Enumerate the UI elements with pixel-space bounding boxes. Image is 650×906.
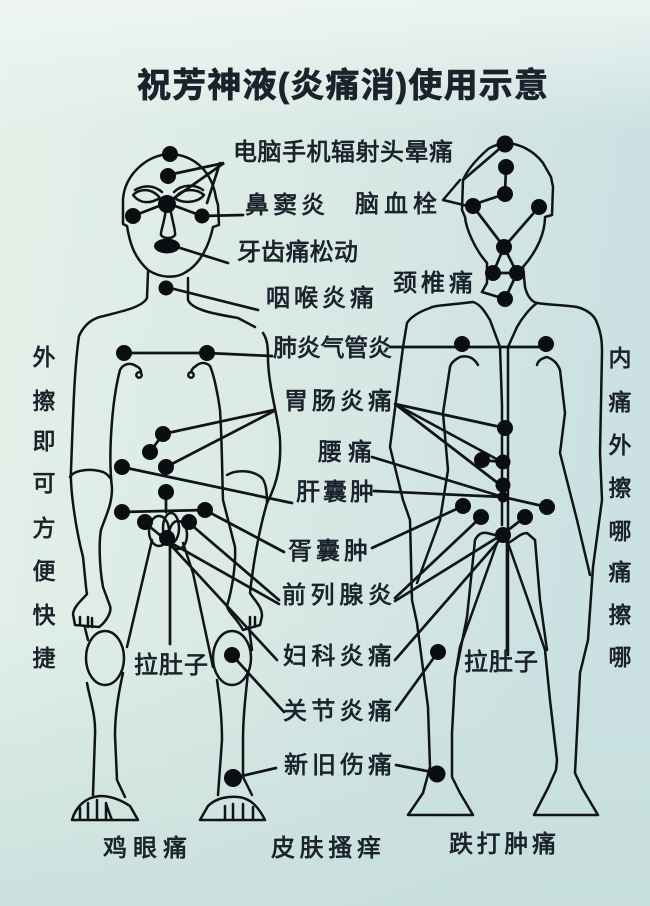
right vertical text: 外 — [608, 432, 632, 458]
center labels — [134, 139, 538, 779]
center labels: 拉肚子 — [134, 652, 208, 679]
center labels: 颈椎痛 — [393, 270, 473, 297]
bottom labels: 鸡眼痛 — [103, 835, 187, 862]
left vertical text: 便 — [32, 558, 56, 584]
front body outline — [70, 154, 280, 820]
right vertical text: 哪 — [608, 644, 632, 670]
left vertical text: 外 — [32, 344, 56, 370]
left vertical text: 擦 — [32, 388, 56, 414]
back acupoints — [428, 136, 555, 782]
center labels: 牙齿痛松动 — [237, 239, 358, 266]
bottom labels — [103, 831, 556, 862]
right vertical text — [608, 345, 632, 670]
center labels: 胃肠炎痛 — [284, 388, 392, 415]
right vertical text: 痛 — [608, 559, 632, 585]
figure: front body — [70, 146, 292, 820]
center labels: 前列腺炎 — [282, 582, 392, 609]
left vertical text: 方 — [32, 515, 56, 541]
left vertical text: 捷 — [32, 645, 56, 671]
center labels: 妇科炎痛 — [283, 643, 392, 670]
bottom labels: 皮肤搔痒 — [271, 835, 381, 862]
center labels: 肺炎气管炎 — [273, 335, 392, 362]
right vertical text: 擦 — [608, 602, 632, 628]
right vertical text: 内 — [608, 345, 632, 371]
right vertical text: 痛 — [608, 389, 632, 415]
figure: back body — [372, 136, 602, 815]
center labels: 胥囊肿 — [288, 538, 368, 565]
center labels: 关节炎痛 — [283, 698, 392, 725]
left vertical text: 即 — [32, 428, 56, 454]
center labels: 电脑手机辐射头晕痛 — [233, 139, 453, 166]
center labels: 鼻窦炎 — [245, 192, 325, 219]
center labels: 腰痛 — [318, 439, 372, 466]
center labels: 脑血栓 — [355, 191, 437, 218]
front leader lines — [122, 163, 292, 778]
left vertical text: 快 — [32, 602, 56, 628]
center labels: 新旧伤痛 — [284, 752, 392, 779]
center labels: 拉肚子 — [464, 649, 538, 676]
left vertical text — [32, 344, 56, 671]
title: 祝芳神液(炎痛消)使用示意 — [137, 67, 548, 105]
front acupoints — [114, 146, 242, 787]
bottom labels: 跌打肿痛 — [449, 831, 556, 858]
back body outline — [390, 143, 602, 815]
center labels: 咽喉炎痛 — [266, 285, 374, 312]
right vertical text: 哪 — [608, 518, 632, 544]
right vertical text: 擦 — [608, 475, 632, 501]
back leader lines — [372, 144, 547, 773]
left vertical text: 可 — [32, 470, 56, 496]
center labels: 肝囊肿 — [296, 479, 374, 506]
